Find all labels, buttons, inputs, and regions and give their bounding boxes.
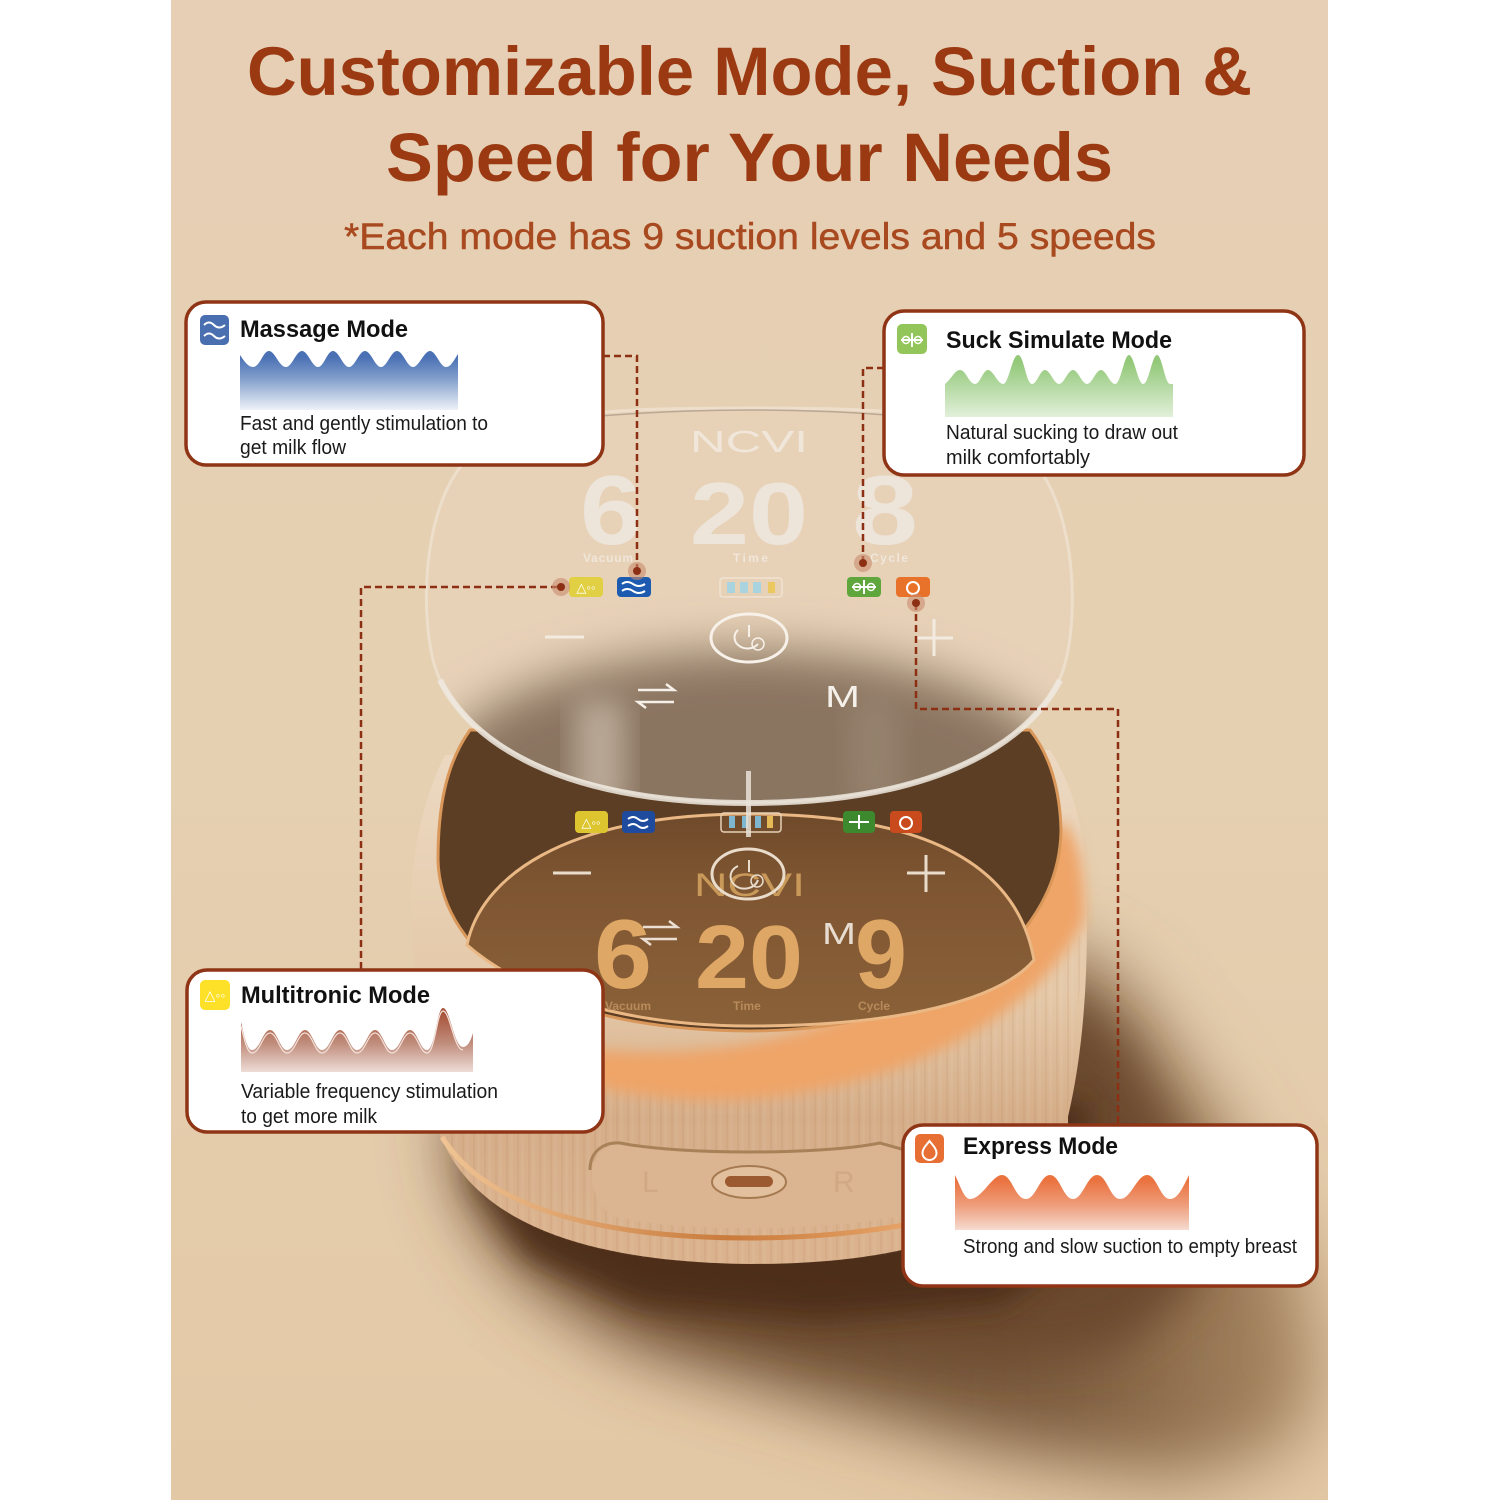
lid swap symbol (638, 684, 674, 708)
wave chart: express (955, 1175, 1189, 1230)
gold ring (442, 1137, 920, 1238)
description: multitronic: to get more milk (241, 1106, 378, 1128)
panel: multitronic mode (187, 970, 603, 1132)
lid power button (711, 614, 787, 662)
reflected display labels: Time (733, 999, 761, 1013)
display labels: Time (733, 551, 768, 565)
lid M symbol: M (825, 679, 860, 714)
device body (411, 750, 1087, 1240)
description: massage (240, 413, 488, 459)
product: base device (411, 730, 1087, 1264)
display labels (583, 551, 908, 565)
display labels: Cycle (870, 551, 908, 565)
lid side rim (426, 408, 1072, 803)
lid centre tab (746, 771, 751, 837)
heading: multitronic mode: Multitronic Mode (241, 982, 430, 1009)
panel power button (712, 849, 784, 899)
display digits: 6 (580, 455, 642, 565)
title: Speed for Your Needs (386, 119, 1113, 196)
icon: suck (897, 324, 927, 354)
icon: express drop (915, 1134, 944, 1163)
transparent display lid (425, 406, 1074, 837)
lid express icon (896, 577, 930, 597)
panel: suck simulate mode (884, 311, 1304, 475)
charging port panel (592, 1143, 905, 1228)
orange light glow (560, 820, 1084, 1100)
panel minus and plus controls (553, 855, 945, 892)
background panel (171, 0, 1328, 1500)
lid bottom rim (440, 680, 1060, 803)
lid minus and plus controls (545, 619, 953, 656)
device ribbed foot (430, 1050, 1068, 1264)
panel: massage mode (186, 302, 603, 465)
heading: massage mode: Massage Mode (240, 316, 408, 343)
heading: suck simulate mode: Suck Simulate Mode (946, 327, 1172, 354)
lid suck icon (847, 577, 881, 597)
reflected display labels (605, 999, 890, 1013)
description: massage: get milk flow (240, 437, 347, 459)
display digits: 20 (690, 464, 808, 563)
reflected display labels: Cycle (858, 999, 890, 1013)
connector: multitronic mode (361, 578, 570, 969)
reflected display digits: 6 (594, 899, 652, 1009)
connector: suck simulate mode (854, 368, 884, 572)
panel mode icons (575, 811, 922, 833)
description: suck (946, 422, 1178, 469)
lid battery icon (720, 578, 782, 597)
lid multitronic icon (569, 577, 603, 597)
L and R markings (642, 1166, 855, 1199)
L and R markings: L (642, 1166, 659, 1199)
reflected tray (467, 814, 1034, 1026)
lid multitronic icon: △◦◦ (576, 580, 596, 595)
device cast shadow (450, 950, 1325, 1480)
wave chart: multitronic (241, 1008, 473, 1072)
description: suck: Natural sucking to draw out (946, 422, 1178, 444)
display digits: 8 (852, 455, 918, 565)
panel: express mode (903, 1125, 1317, 1286)
description: massage: Fast and gently stimulation to (240, 413, 488, 435)
NCVI logo: NCVI (690, 424, 808, 459)
reflected display digits: 9 (855, 899, 907, 1009)
mirror control panel (438, 730, 1061, 1031)
reflected display labels: Vacuum (605, 999, 651, 1013)
port panel top edge (590, 1143, 905, 1170)
icon: massage waves (200, 315, 229, 345)
reflected display digits: 20 (695, 908, 803, 1008)
ribbed texture (445, 930, 1086, 1240)
description: express: Strong and slow suction to empty breast (963, 1236, 1297, 1258)
display digits (580, 455, 918, 565)
description: multitronic (241, 1081, 498, 1128)
description: multitronic: Variable frequency stimulation (241, 1081, 498, 1103)
connector: massage mode (603, 356, 646, 580)
lid massage icon (617, 577, 651, 597)
L and R markings: R (833, 1166, 855, 1199)
wave chart: suck (945, 355, 1173, 417)
icon: multitronic drops: △◦◦ (205, 987, 225, 1003)
wave highlight: multitronic (241, 1011, 463, 1053)
connector: express mode (907, 594, 1118, 1124)
see-through shadow in lid (454, 618, 1045, 802)
charging port (712, 1166, 786, 1198)
wave chart: massage (240, 351, 458, 410)
lid top edge (600, 410, 900, 416)
subtitle: *Each mode has 9 suction levels and 5 speeds (344, 216, 1156, 257)
reflected NCVI logo: NCVI (694, 867, 805, 903)
title: Customizable Mode, Suction & (247, 33, 1252, 110)
icon: multitronic drops (200, 980, 230, 1010)
panel mode icons: △◦◦ (581, 815, 601, 830)
panel swap symbol (643, 921, 677, 945)
panel M symbol: M (822, 916, 856, 951)
description: suck: milk comfortably (946, 447, 1090, 469)
reflected display digits (594, 899, 907, 1009)
display labels: Vacuum (583, 551, 633, 565)
foot ribs (450, 1145, 1060, 1264)
title (247, 33, 1252, 196)
lid glass fill (426, 408, 1072, 803)
heading: express mode: Express Mode (963, 1133, 1118, 1160)
